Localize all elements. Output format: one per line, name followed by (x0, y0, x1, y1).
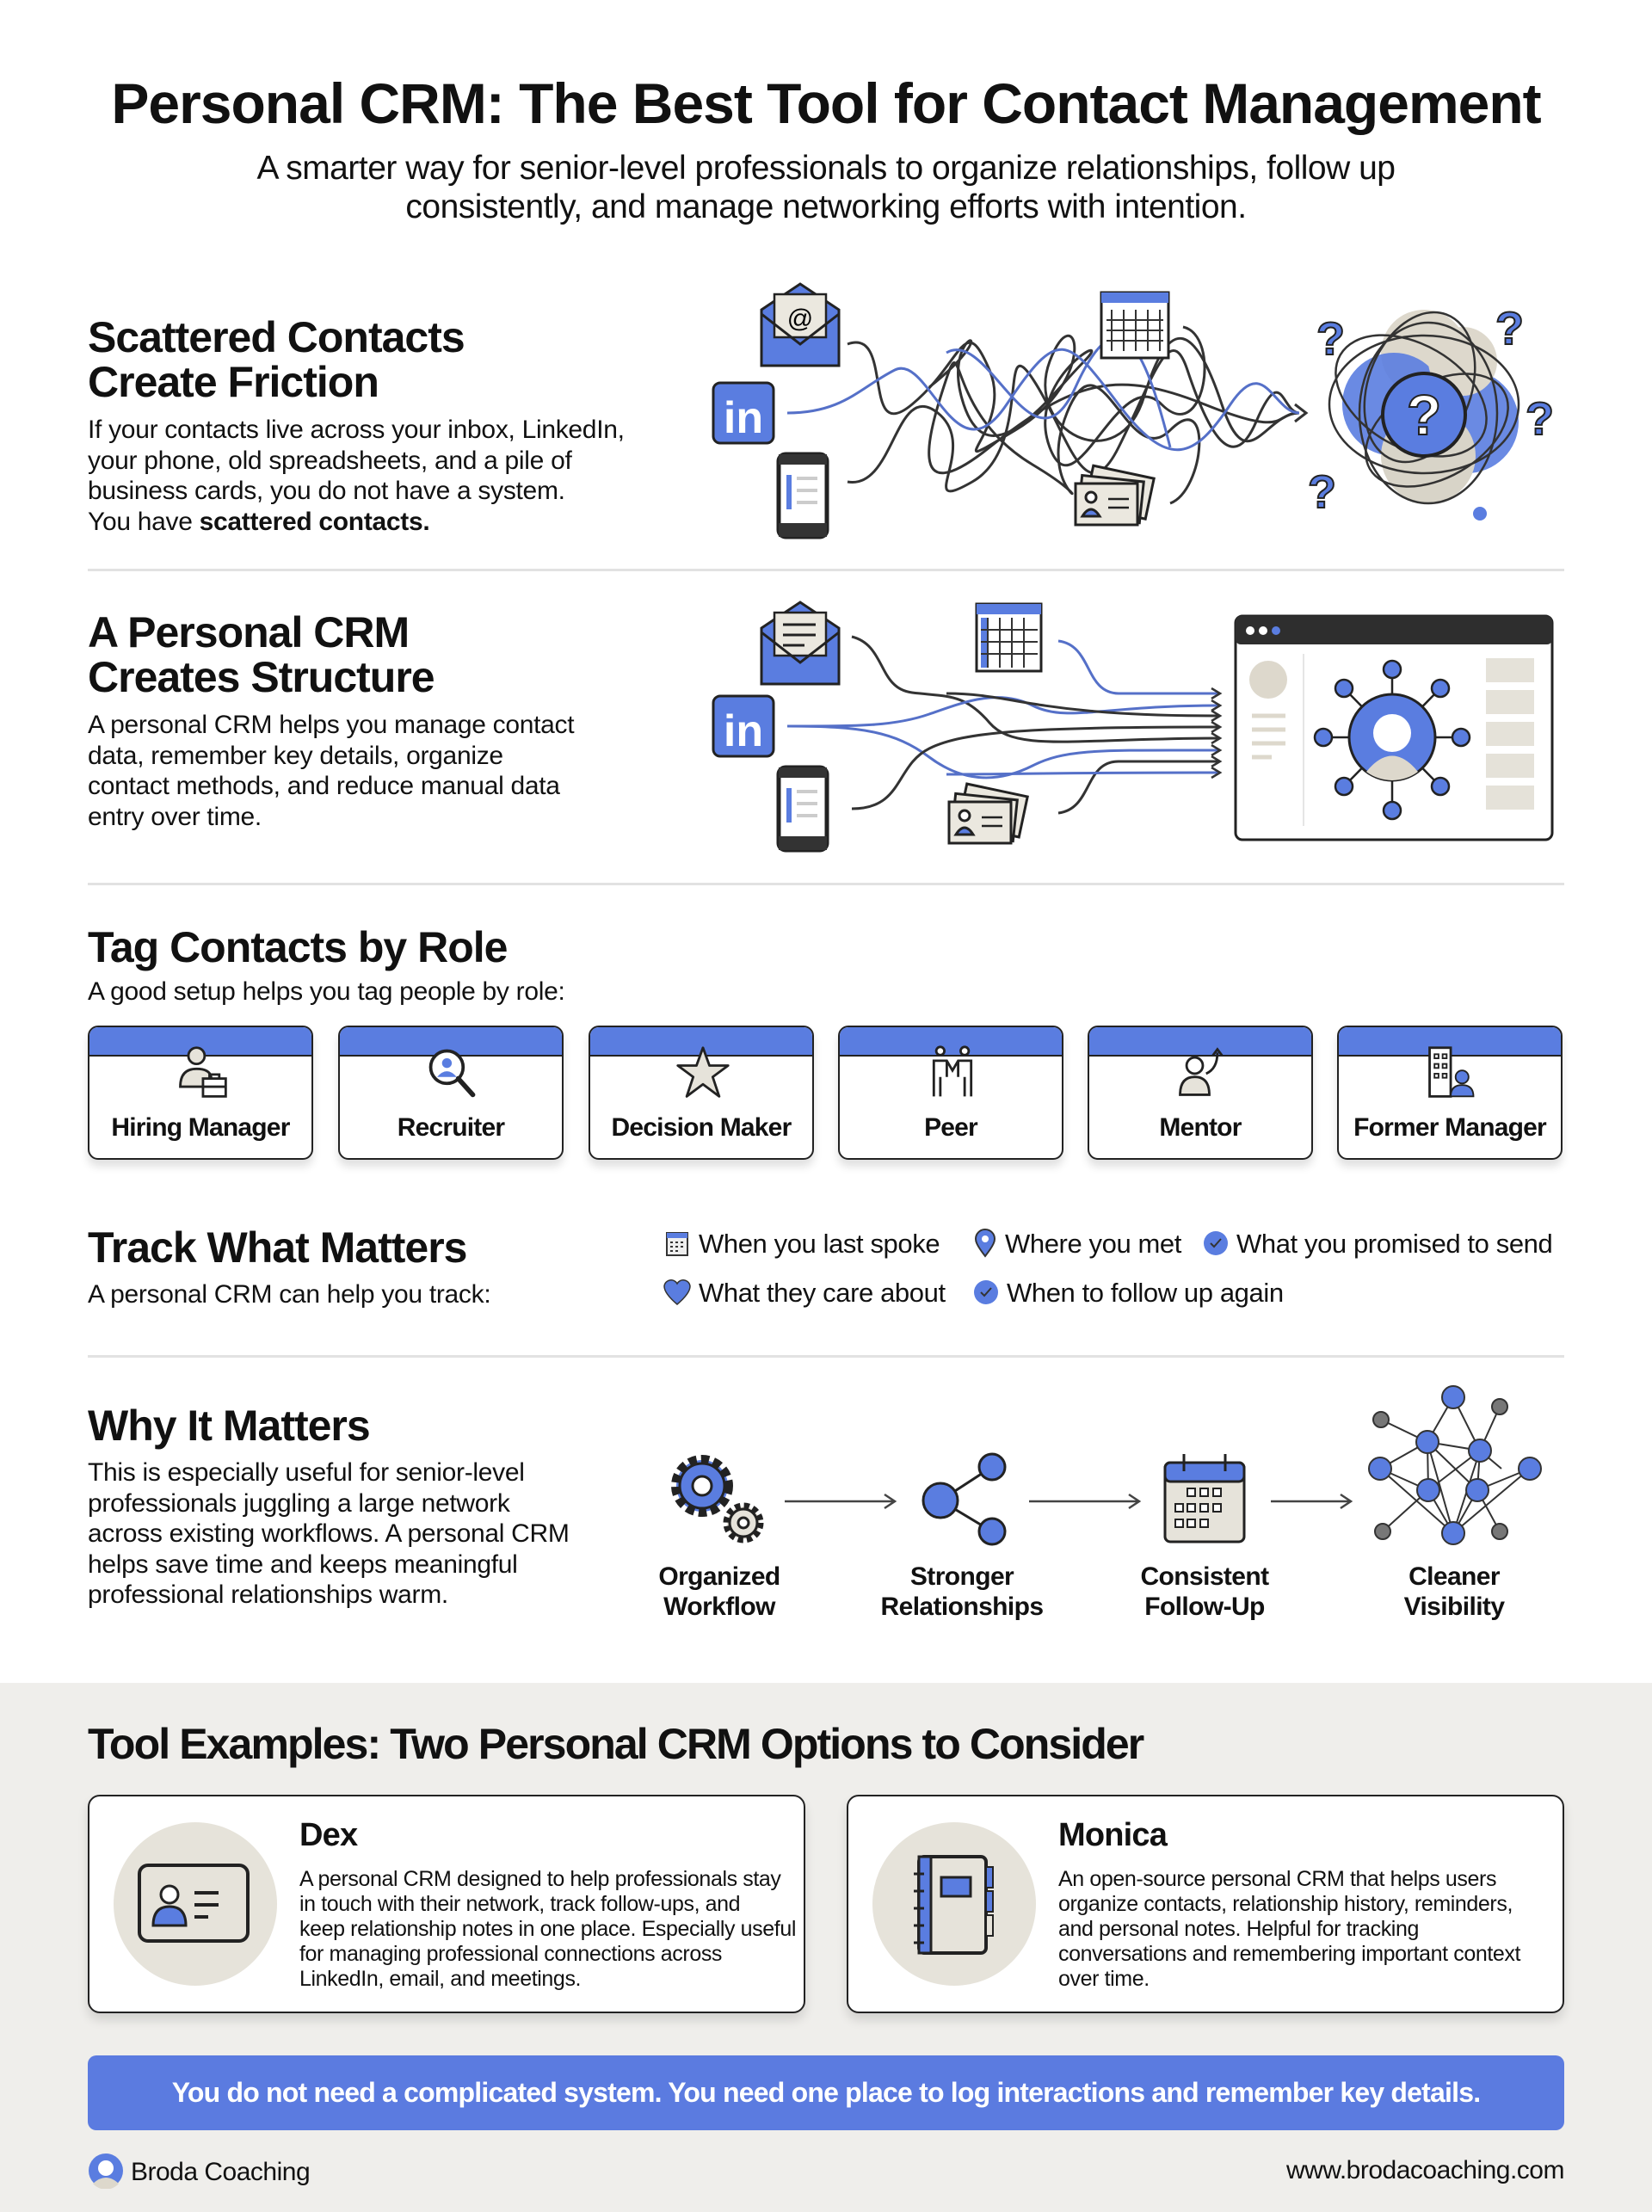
item: promised: What you promised to send (1236, 1229, 1552, 1259)
icon: phone (779, 767, 827, 850)
tangled lines (848, 327, 1299, 503)
heading: scattered contacts: Create Friction (88, 358, 379, 406)
icon: crm window (1236, 616, 1552, 840)
icon: linkedin: in (724, 706, 763, 756)
heading: track what matters: Track What Matters (88, 1223, 466, 1272)
card: dex (88, 1795, 805, 2013)
card: dex: A personal CRM designed to help professionals stay (299, 1867, 781, 1891)
icon: notebook (872, 1822, 1036, 1986)
text: scattered contacts: business cards, you do not have a system. (88, 477, 565, 505)
icon: email (761, 602, 839, 684)
item: follow up: When to follow up again (1007, 1278, 1284, 1308)
banner: key message (88, 2055, 1564, 2130)
icon: linkedin (713, 383, 774, 443)
label: cleaner visibility (1404, 1562, 1505, 1621)
text: why it matters: This is especially useful for senior-level (88, 1458, 525, 1487)
card: monica: conversations and remembering important context (1058, 1942, 1520, 1966)
text: scattered contacts: You have scattered contacts. (88, 508, 429, 535)
footer: url: www.brodacoaching.com (1286, 2156, 1564, 2184)
flow: benefits (671, 1385, 1542, 1545)
heading: crm structure: Creates Structure (88, 653, 435, 701)
icon: confused blob (1308, 297, 1554, 521)
card: monica: Monica (1058, 1817, 1167, 1853)
text: scattered contacts: your phone, old spreadsheets, and a pile of (88, 446, 572, 475)
label: organized workflow (658, 1562, 780, 1621)
label: stronger relationships (881, 1562, 1043, 1621)
text: crm structure: entry over time. (88, 802, 262, 831)
text: crm structure: A personal CRM helps you manage contact (88, 711, 574, 739)
label: consistent follow-up: Follow-Up (1144, 1593, 1265, 1621)
label: stronger relationships: Stronger (910, 1562, 1014, 1591)
card: monica: over time. (1058, 1967, 1150, 1991)
icon: business cards (949, 784, 1027, 843)
card: decision maker: Decision Maker (612, 1113, 791, 1142)
heading: why it matters: Why It Matters (88, 1402, 370, 1450)
footer: logo (89, 2153, 310, 2189)
label: organized workflow: Organized (658, 1562, 780, 1591)
item: last spoke: When you last spoke (699, 1229, 940, 1259)
item: care about: What they care about (699, 1278, 946, 1308)
list: tracked items (663, 1229, 1552, 1308)
card: hiring manager: Hiring Manager (111, 1113, 290, 1142)
card: monica (847, 1795, 1564, 2013)
icon: spreadsheet (1101, 293, 1168, 358)
icon: contact card (114, 1822, 277, 1986)
icon: network (1369, 1386, 1541, 1544)
text: scattered contacts: If your contacts live across your inbox, LinkedIn, (88, 416, 625, 444)
text: tag intro: A good setup helps you tag people by role: (88, 977, 564, 1006)
illustration: scattered contacts (712, 282, 1554, 539)
label: consistent follow-up: Consistent (1140, 1562, 1268, 1591)
icon: calendar (1165, 1454, 1244, 1542)
text: why it matters: professional relationships warm. (88, 1580, 448, 1609)
icon: confused blob: ? (1407, 383, 1441, 447)
heading: scattered contacts: Scattered Contacts (88, 313, 465, 361)
text: crm structure: contact methods, and reduce manual data (88, 772, 560, 800)
heading: tool examples: Tool Examples: Two Personal CRM Options to Consider (88, 1720, 1143, 1768)
icon: business cards (1076, 465, 1154, 525)
card: former manager (1337, 1026, 1563, 1160)
card: mentor (1088, 1026, 1313, 1160)
icon: phone (779, 454, 827, 537)
card: dex: keep relationship notes in one place. Especially useful (299, 1917, 796, 1941)
card: decision maker (589, 1026, 814, 1160)
label: organized workflow: Workflow (663, 1593, 775, 1621)
subtitle (256, 150, 1395, 225)
arrows (785, 1494, 1351, 1508)
card: monica: and personal notes. Helpful for tracking (1058, 1917, 1419, 1941)
text: crm structure (88, 711, 575, 831)
title: Personal CRM: The Best Tool for Contact Management (111, 71, 1541, 135)
card: recruiter: Recruiter (398, 1113, 504, 1142)
text: why it matters: professionals juggling a large network (88, 1488, 510, 1518)
illustration: crm structure (712, 601, 1554, 852)
text: track intro: A personal CRM can help you track: (88, 1280, 490, 1309)
card: dex: Dex (299, 1817, 357, 1853)
icon: linkedin (713, 696, 774, 756)
icon: confused blob: ? (1495, 303, 1524, 354)
label: cleaner visibility: Visibility (1404, 1593, 1504, 1621)
card: recruiter (338, 1026, 564, 1160)
card: mentor: Mentor (1159, 1113, 1242, 1142)
icon: share (923, 1454, 1005, 1544)
subtitle: A smarter way for senior-level professionals to organize relationships, follow up (256, 150, 1395, 187)
icon: linkedin: in (724, 393, 763, 443)
card: dex: in touch with their network, track follow-ups, and (299, 1892, 740, 1916)
icon: spreadsheet (977, 604, 1041, 671)
banner: key message: You do not need a complicated system. You need one place to log interactions and remember key details. (172, 2077, 1480, 2108)
card: peer: Peer (924, 1113, 977, 1142)
icon: confused blob: ? (1526, 393, 1554, 445)
heading: crm structure (88, 608, 435, 701)
icon: email: @ (787, 305, 813, 333)
card: dex: for managing professional connections across (299, 1942, 722, 1966)
icon: confused blob: ? (1308, 466, 1336, 518)
item: where met: Where you met (1005, 1229, 1181, 1259)
heading: tag contacts: Tag Contacts by Role (88, 923, 507, 971)
panel: tool examples (0, 1683, 1652, 2212)
text: scattered contacts (88, 416, 625, 535)
text: crm structure: data, remember key details, organize (88, 742, 503, 769)
card: hiring manager (88, 1026, 313, 1160)
icon: confused blob: ? (1316, 313, 1345, 365)
label: stronger relationships: Relationships (881, 1593, 1043, 1621)
heading: crm structure: A Personal CRM (88, 608, 409, 656)
text: why it matters (88, 1458, 570, 1609)
heading: scattered contacts (88, 313, 465, 406)
label: consistent follow-up (1140, 1562, 1269, 1621)
card: peer (838, 1026, 1063, 1160)
label: cleaner visibility: Cleaner (1409, 1562, 1500, 1591)
footer: logo: Broda Coaching (131, 2158, 310, 2186)
card: former manager: Former Manager (1353, 1113, 1546, 1142)
icon: gears (676, 1460, 760, 1539)
card: monica: organize contacts, relationship history, reminders, (1058, 1892, 1513, 1916)
text: why it matters: helps save time and keeps meaningful (88, 1550, 518, 1578)
card: dex: LinkedIn, email, and meetings. (299, 1967, 581, 1991)
card: monica: An open-source personal CRM that helps users (1058, 1867, 1496, 1891)
icon: email (761, 284, 839, 366)
subtitle: consistently, and manage networking efforts with intention. (405, 188, 1247, 225)
text: why it matters: across existing workflows. A personal CRM (88, 1519, 570, 1548)
